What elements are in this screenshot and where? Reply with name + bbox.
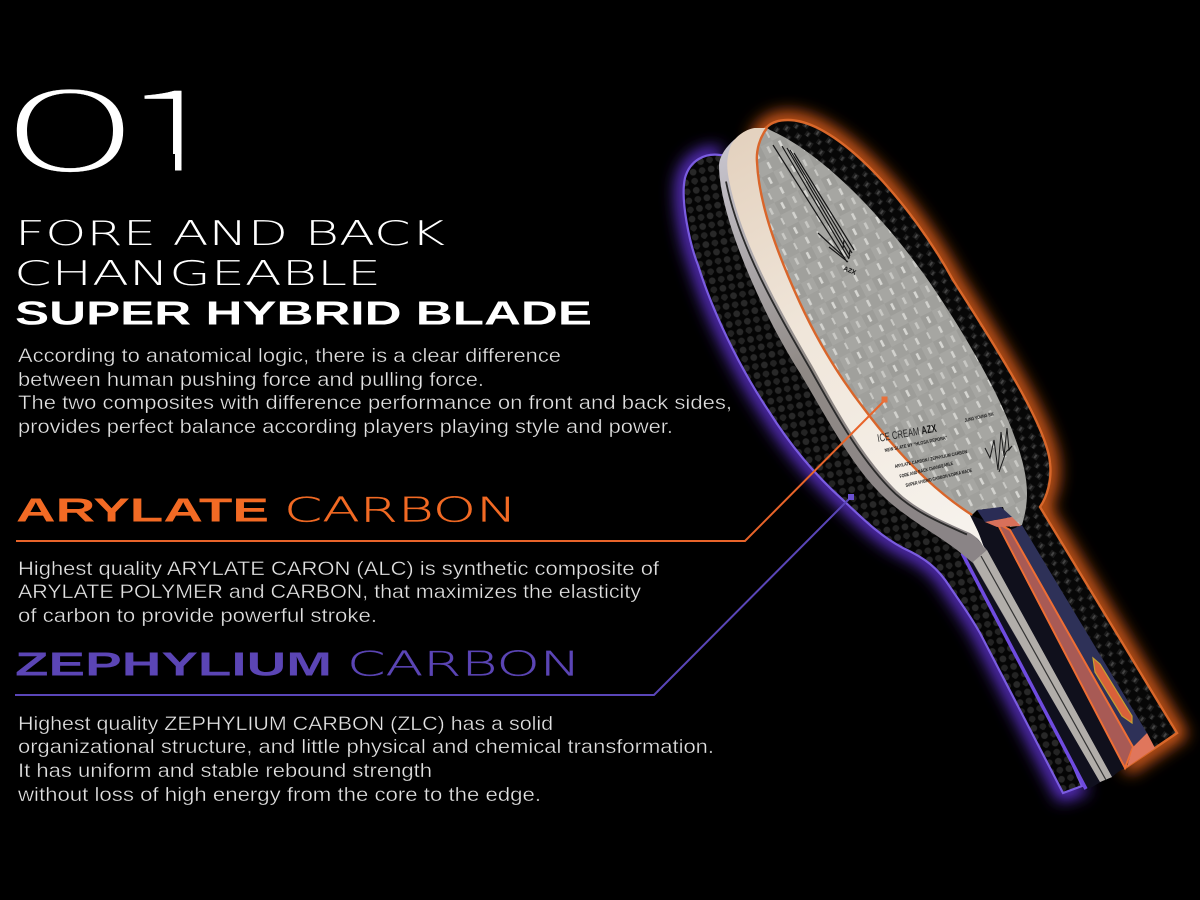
purple glow bbox=[684, 155, 1085, 793]
handle logo bbox=[1093, 658, 1132, 723]
arylate carbon title: CARBON bbox=[284, 490, 517, 530]
grey carbon face bbox=[757, 128, 1027, 527]
handle end block bbox=[1127, 733, 1155, 767]
zephylium carbon title: CARBON bbox=[347, 644, 581, 684]
product name: ICE CREAM AZX bbox=[876, 423, 938, 445]
handle blue carbon strip bbox=[1010, 525, 1147, 747]
racket illustration bbox=[684, 120, 1177, 793]
zephylium text: Highest quality ZEPHYLIUM CARBON (ZLC) has a solid bbox=[18, 713, 553, 735]
heading: SUPER HYBRID BLADE bbox=[15, 296, 592, 332]
blade edge rim bbox=[719, 128, 1112, 782]
product details: JUNG YOUNG SIK bbox=[964, 411, 995, 424]
product details: ARYLATE CARBON / ZEPHYLIUM CARBON bbox=[894, 449, 968, 470]
orange face edge bbox=[757, 128, 972, 515]
zephylium text: organizational structure, and little physical and chemical transformation. bbox=[18, 736, 714, 758]
back carbon face: zephylium bbox=[684, 155, 1082, 793]
intro text: The two composites with difference performance on front and back sides, bbox=[18, 392, 732, 414]
section number: 1 bbox=[114, 40, 232, 204]
handle navy layer bbox=[960, 523, 1125, 790]
section number: 0 bbox=[3, 40, 137, 204]
arrow graphic on face bbox=[773, 145, 854, 262]
rim dark line bbox=[726, 182, 967, 534]
heading: FORE AND BACK bbox=[15, 214, 445, 254]
arylate carbon title bbox=[16, 490, 517, 530]
arylate text: Highest quality ARYLATE CARON (ALC) is synthetic composite of bbox=[18, 558, 660, 580]
intro text: According to anatomical logic, there is a clear difference bbox=[18, 345, 561, 367]
arylate text: of carbon to provide powerful stroke. bbox=[18, 605, 377, 627]
arylate text bbox=[18, 558, 660, 627]
zephylium text bbox=[17, 713, 714, 806]
handle dark inlay bbox=[970, 515, 1123, 777]
intro text: between human pushing force and pulling force. bbox=[18, 369, 484, 391]
orange glow bbox=[758, 120, 1177, 768]
intro text: provides perfect balance according players playing style and power. bbox=[18, 416, 673, 438]
product details bbox=[884, 411, 995, 489]
product details: FORE AND BACK CHANGEABLE bbox=[899, 461, 954, 480]
handle salmon strip bbox=[997, 523, 1133, 768]
product details: SUPER HYBRID CARBON KOREA MADE bbox=[905, 468, 973, 489]
zephylium carbon title: ZEPHYLIUM bbox=[15, 646, 332, 684]
front carbon edge: arylate bbox=[758, 120, 1177, 768]
handle top block bbox=[977, 507, 1012, 522]
intro text bbox=[18, 345, 732, 438]
product details: NEW SLATE BY "HLOSA REPORA" bbox=[884, 435, 948, 454]
zephylium text: It has uniform and stable rebound strength bbox=[18, 760, 432, 782]
brand mark: AZX bbox=[842, 265, 858, 277]
arylate text: ARYLATE POLYMER and CARBON, that maximizes the elasticity bbox=[18, 581, 641, 603]
zephylium text: without loss of high energy from the core to the edge. bbox=[17, 784, 541, 806]
heading: CHANGEABLE bbox=[14, 254, 381, 294]
purple leader line bbox=[15, 494, 854, 695]
signature bbox=[985, 428, 1012, 472]
handle wood strip bbox=[973, 550, 1112, 782]
section number bbox=[3, 40, 242, 204]
purple handle line bbox=[962, 553, 1086, 789]
zephylium carbon title bbox=[15, 644, 581, 684]
orange leader line bbox=[16, 396, 888, 541]
heading bbox=[14, 214, 592, 332]
arylate carbon title: ARYLATE bbox=[16, 492, 269, 530]
wood layer bbox=[727, 128, 985, 550]
